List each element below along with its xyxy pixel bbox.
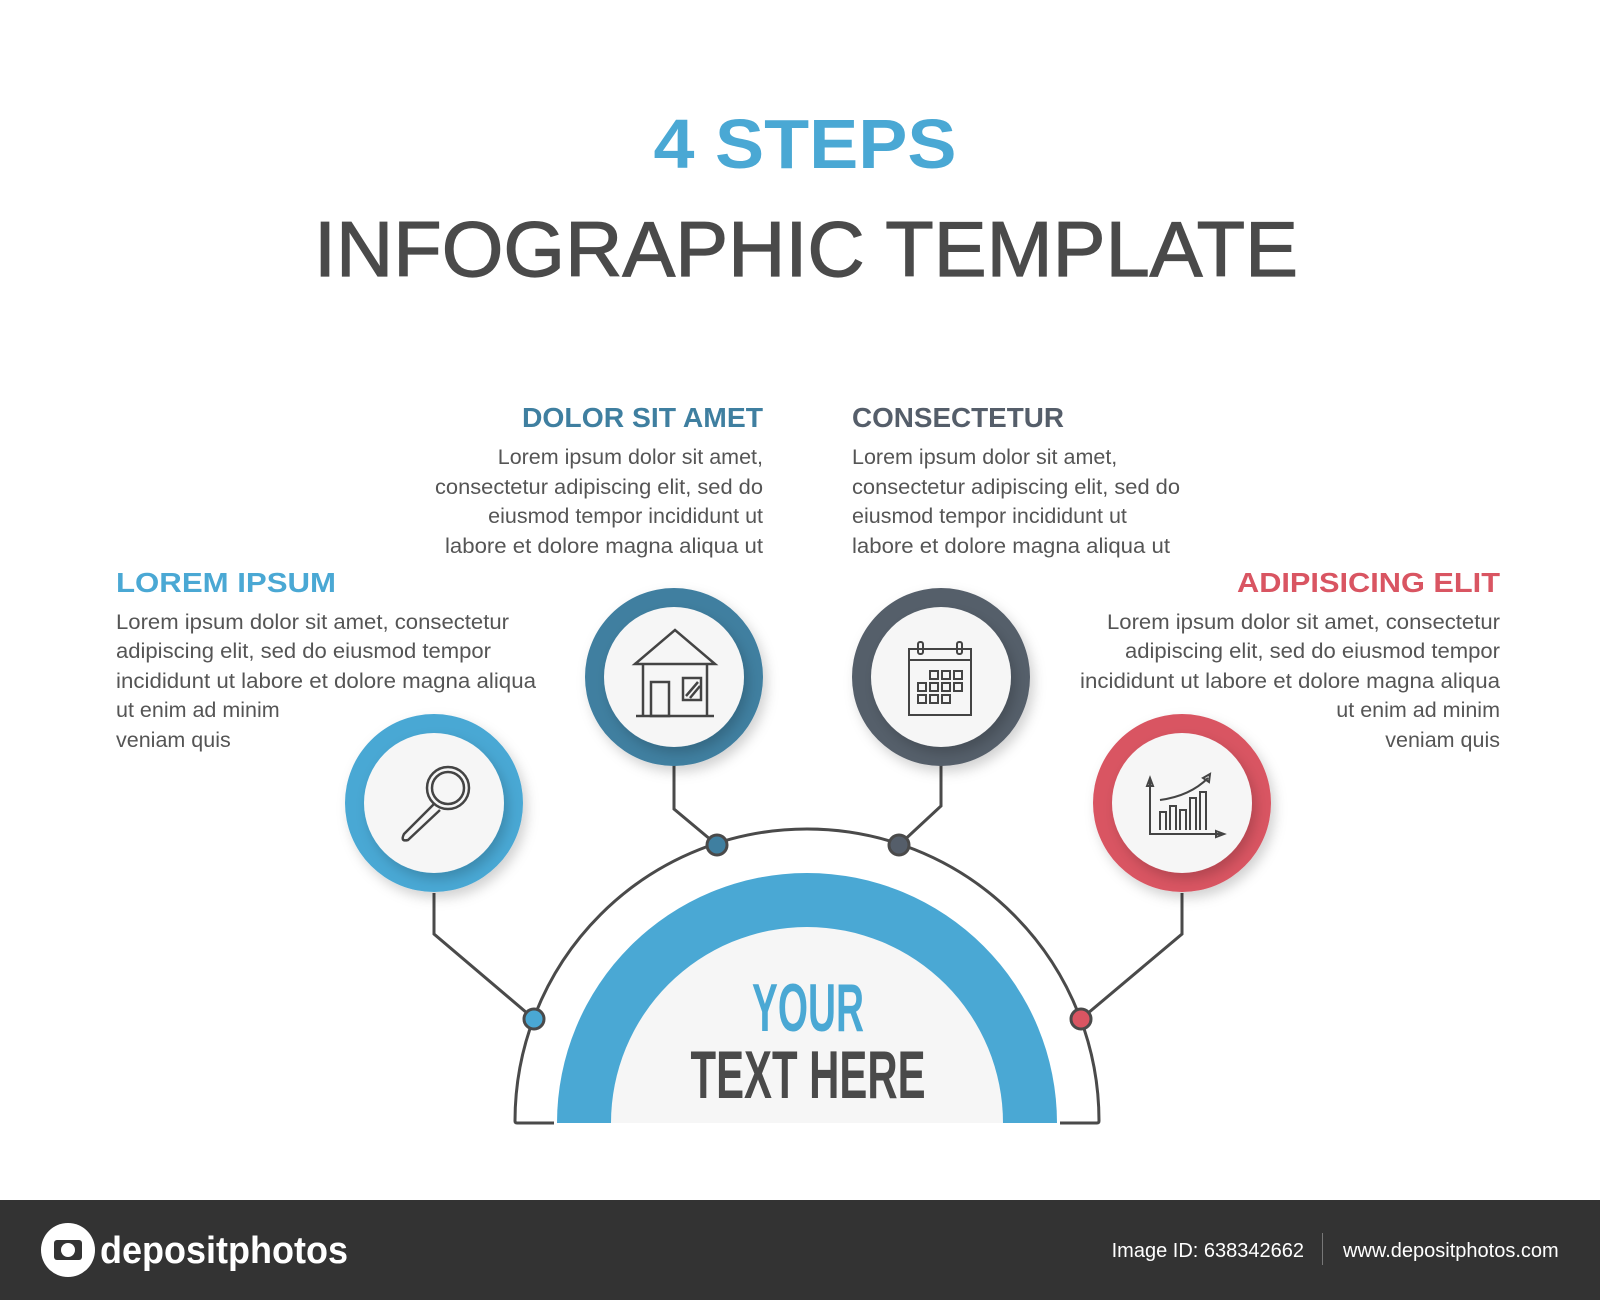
outer arc line [515, 829, 1099, 1123]
text block: adipisicing elit [1080, 567, 1500, 752]
footer text: www.depositphotos.com [1342, 1240, 1559, 1262]
text block: dolor sit amet: Lorem ipsum dolor sit amet, [498, 445, 763, 469]
icon: growth chart [1147, 774, 1224, 837]
text block: adipisicing elit: ut enim ad minim [1336, 698, 1500, 722]
center text: TEXT HERE [690, 1037, 926, 1113]
title [314, 105, 1298, 293]
text block: consectetur: eiusmod tempor incididunt ut [852, 504, 1127, 528]
text block: consectetur [852, 402, 1180, 558]
text block: consectetur: consectetur adipiscing elit, sed do [852, 475, 1180, 499]
icon: calendar [909, 642, 971, 715]
text block: lorem ipsum: Lorem ipsum dolor sit amet, consectetur [116, 610, 509, 634]
footer bar [0, 1200, 1600, 1300]
step 3 circle: calendar [852, 588, 1030, 766]
step 1 circle: magnifier [345, 714, 523, 892]
icon: house [635, 630, 715, 716]
text block: adipisicing elit: veniam quis [1385, 728, 1500, 752]
title: 4 STEPS [654, 105, 956, 183]
center text [690, 970, 926, 1113]
text block: consectetur: Lorem ipsum dolor sit amet, [852, 445, 1117, 469]
step 4 circle: chart [1093, 714, 1271, 892]
icon: magnifier [403, 767, 469, 840]
text block: adipisicing elit: Lorem ipsum dolor sit amet, consectetur [1107, 610, 1500, 634]
text block: lorem ipsum: veniam quis [116, 728, 231, 752]
text block: dolor sit amet: labore et dolore magna aliqua ut [445, 534, 763, 558]
text block: dolor sit amet: consectetur adipiscing elit, sed do [435, 475, 763, 499]
dots [524, 835, 1091, 1029]
text block: lorem ipsum [116, 567, 536, 752]
text block: dolor sit amet: DOLOR SIT AMET [522, 402, 763, 433]
center text: YOUR [752, 970, 864, 1046]
text block: lorem ipsum: ut enim ad minim [116, 698, 280, 722]
logo: depositphotos [100, 1230, 348, 1272]
text block: lorem ipsum: LOREM IPSUM [116, 567, 336, 598]
text block: consectetur: labore et dolore magna aliqua ut [852, 534, 1170, 558]
text block: adipisicing elit: incididunt ut labore et dolore magna aliqua [1080, 669, 1500, 693]
footer text: Image ID: 638342662 [1112, 1240, 1304, 1262]
step 2 circle: house [585, 588, 763, 766]
text block: adipisicing elit: adipiscing elit, sed do eiusmod tempor [1125, 639, 1500, 663]
connectors [434, 765, 1182, 1019]
central blue arch [557, 873, 1057, 1123]
title: INFOGRAPHIC TEMPLATE [314, 205, 1298, 293]
text block: lorem ipsum: adipiscing elit, sed do eiusmod tempor [116, 639, 491, 663]
text block: lorem ipsum: incididunt ut labore et dolore magna aliqua [116, 669, 536, 693]
footer text [1112, 1233, 1559, 1265]
text block: adipisicing elit: ADIPISICING ELIT [1237, 567, 1500, 598]
text block: dolor sit amet [435, 402, 763, 558]
logo [41, 1223, 348, 1277]
text block: dolor sit amet: eiusmod tempor incididunt ut [488, 504, 763, 528]
text block: consectetur: CONSECTETUR [852, 402, 1064, 433]
